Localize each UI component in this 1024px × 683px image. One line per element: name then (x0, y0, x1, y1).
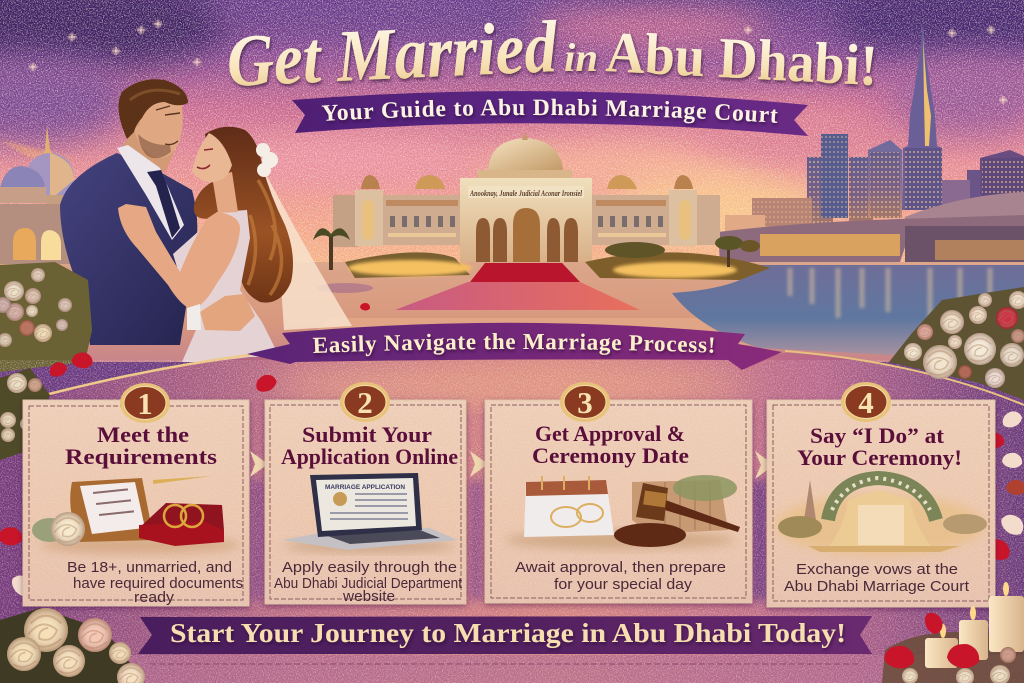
tower: Burj (902, 22, 942, 210)
scattered petals (0, 303, 1024, 604)
shirt (117, 145, 184, 240)
jacket (60, 153, 197, 345)
heading 2: Application Online (281, 444, 458, 469)
wedding arch illustration (775, 478, 987, 555)
central dome (488, 138, 563, 170)
heading 3 (532, 421, 689, 468)
title: in (564, 35, 598, 80)
step 2 card (265, 382, 466, 605)
heading 3: Get Approval & (535, 421, 685, 446)
step 3 card (485, 382, 752, 603)
text 1: ready (134, 590, 175, 606)
arches (476, 218, 490, 262)
heading 2: Submit Your (302, 422, 432, 447)
candles and flowers (882, 582, 1024, 683)
arrow 1 (250, 451, 268, 477)
ground plaza (0, 262, 1024, 362)
heading 4: Say “I Do” at (810, 423, 945, 448)
text 2: Abu Dhabi Judicial Department (274, 576, 462, 592)
heading 2 (281, 422, 458, 469)
text 2 (274, 560, 462, 605)
text 2: website (342, 589, 395, 605)
bottom left roses (0, 608, 145, 683)
couple (60, 79, 352, 362)
left wing (345, 195, 465, 245)
face (192, 133, 232, 182)
hair (118, 79, 188, 139)
text 1 (67, 560, 243, 606)
heading 1: Meet the (97, 422, 189, 447)
skyline (718, 22, 1024, 262)
step 1 card (23, 383, 249, 606)
background sky (0, 0, 1024, 300)
water (672, 265, 1024, 362)
left garden roses (0, 262, 92, 372)
left mosque (0, 125, 74, 264)
court building: Anooknay, Junale Judicial Aconar Ironsiel (469, 189, 583, 198)
text 3: for your special day (554, 577, 693, 593)
text 1: Be 18+, unmarried, and (67, 560, 232, 576)
veil (265, 172, 352, 330)
heading 1 (65, 422, 217, 469)
subtitle ribbon: Your Guide to Abu Dhabi Marriage Court (322, 98, 779, 128)
heading 1: Requirements (65, 444, 217, 469)
process ribbon (247, 322, 782, 370)
arrow 2 (470, 451, 488, 477)
face (134, 100, 183, 158)
badge 2: 2 (357, 385, 373, 420)
text 4 (784, 562, 969, 595)
step 4 card (767, 382, 995, 607)
badge 4: 4 (858, 385, 874, 420)
title (225, 6, 879, 103)
gardens and palms (313, 228, 770, 280)
neck (118, 130, 175, 172)
long hair (194, 127, 293, 303)
neck and chest (212, 172, 238, 213)
heading 4 (797, 423, 962, 470)
bottom call-to-action ribbon: Start Your Journey to Marriage in Abu Dhabi Today! (170, 618, 846, 648)
lower panel background (0, 351, 1024, 683)
arrow 3 (755, 451, 774, 479)
left garland (0, 368, 50, 460)
text 4: Exchange vows at the (796, 562, 958, 578)
right bouquet (889, 287, 1024, 400)
badge 3: 3 (577, 385, 593, 420)
text 2: Apply easily through the (282, 560, 457, 576)
side towers (355, 190, 383, 246)
arm and hand (118, 204, 240, 310)
clipboard and rings illustration (32, 476, 240, 554)
tie (147, 170, 180, 238)
dress (173, 210, 282, 362)
calendar and gavel illustration (505, 475, 740, 549)
groom hand (200, 294, 255, 331)
hair flower (256, 143, 278, 177)
bottom call-to-action ribbon (138, 616, 872, 654)
text 3: Await approval, then prepare (515, 560, 726, 576)
right wing (585, 195, 720, 245)
laptop illustration (283, 473, 457, 552)
court building (333, 132, 720, 262)
red carpet (395, 263, 640, 310)
groom (60, 79, 197, 345)
heading 4: Your Ceremony! (797, 445, 962, 470)
process ribbon: Easily Navigate the Marriage Process! (312, 333, 716, 360)
badge 1 (120, 383, 170, 423)
text 4: Abu Dhabi Marriage Court (784, 579, 969, 595)
title: Get Married (225, 6, 559, 103)
central facade (460, 178, 592, 262)
badge 1: 1 (137, 386, 153, 421)
badge 4 (841, 382, 891, 422)
badge 2 (340, 382, 390, 422)
text 1: have required documents (73, 576, 243, 592)
text 3 (515, 560, 726, 593)
badge 3 (560, 382, 610, 422)
heading 3: Ceremony Date (532, 443, 689, 468)
subtitle ribbon (292, 91, 808, 136)
bride (118, 127, 293, 362)
laptop illustration: MARRIAGE APPLICATION (325, 484, 405, 491)
title: Abu Dhabi! (604, 19, 879, 98)
